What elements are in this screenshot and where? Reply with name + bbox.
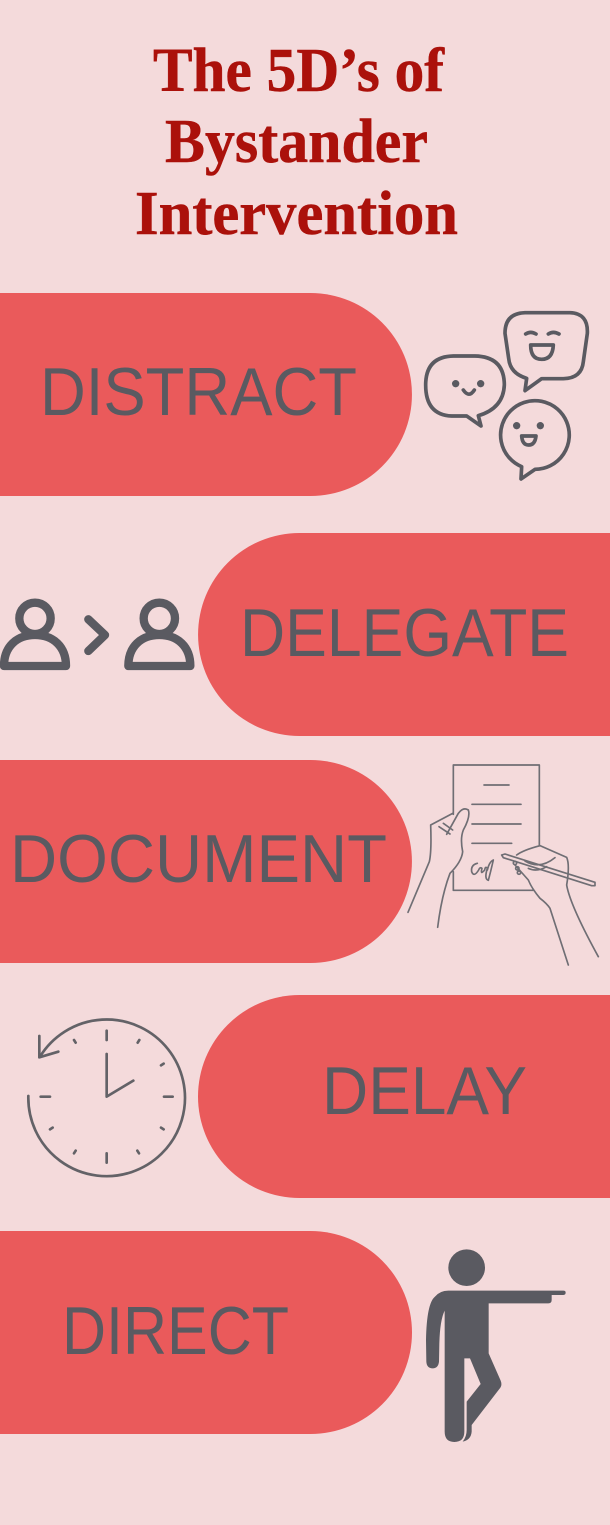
- icon: hands signing a document: [408, 765, 598, 965]
- title: The 5D’s of: [153, 37, 445, 105]
- icon: clock with counter-clockwise arrow: [28, 1019, 185, 1176]
- panel: document: [0, 760, 412, 963]
- icon: standing figure pointing: [426, 1249, 566, 1442]
- label: delay: DELAY: [322, 1053, 527, 1129]
- panel: delay: [198, 995, 610, 1198]
- label: delegate: DELEGATE: [240, 595, 569, 671]
- icon: person passing to another person: [4, 603, 190, 666]
- panel: delegate: [198, 533, 610, 736]
- title: Bystander: [165, 108, 428, 176]
- label: direct: DIRECT: [62, 1293, 289, 1369]
- label: distract: DISTRACT: [40, 354, 357, 430]
- title: Intervention: [135, 180, 458, 248]
- panel: distract: [0, 293, 412, 496]
- label: document: DOCUMENT: [10, 821, 387, 897]
- title: [135, 37, 458, 248]
- icon: speech bubbles with smiling faces: [426, 313, 587, 479]
- panel: direct: [0, 1231, 412, 1434]
